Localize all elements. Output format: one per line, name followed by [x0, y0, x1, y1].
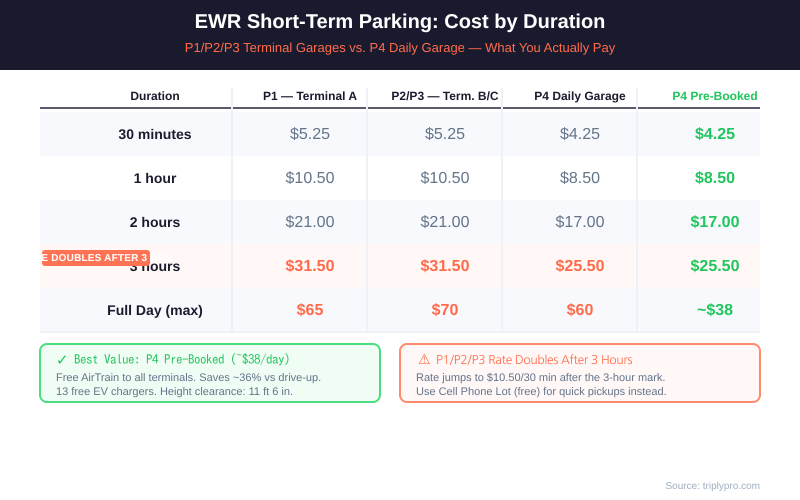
callout body: Free AirTrain to all terminals. Saves ~36% vs drive-up.	[56, 372, 321, 384]
row label: 30 minutes: 30 minutes	[118, 126, 192, 142]
price: $8.50	[695, 170, 735, 187]
price: $10.50	[421, 170, 469, 187]
callout heading: ⚠	[418, 352, 431, 368]
price: $17.00	[556, 214, 604, 231]
column heading: P1: P1 — Terminal A	[263, 89, 357, 103]
price: $21.00	[421, 214, 469, 231]
header banner	[0, 0, 800, 70]
row band: 30 minutes	[40, 112, 760, 156]
column heading: P2/P3: P2/P3 — Term. B/C	[391, 89, 499, 103]
price: $4.25	[560, 126, 600, 143]
price: ~$38	[697, 302, 733, 319]
price: $31.50	[286, 258, 334, 275]
callout heading	[56, 351, 290, 369]
row label: 3 hours: 3 hours	[130, 258, 180, 274]
column heading: P4 Pre-Booked: P4 Pre-Booked	[672, 89, 758, 103]
callout heading	[418, 352, 632, 368]
price: $21.00	[286, 214, 334, 231]
price: $17.00	[691, 214, 739, 231]
title: EWR Short-Term Parking: Cost by Duration	[195, 11, 605, 33]
price: $5.25	[425, 126, 465, 143]
callout heading: ✓	[56, 351, 69, 369]
source note: Source: triplypro.com	[666, 481, 760, 492]
subtitle: P1/P2/P3 Terminal Garages vs. P4 Daily Garage — What You Actually Pay	[185, 40, 615, 55]
callout: best value	[39, 343, 381, 403]
header rule	[40, 107, 760, 109]
callout heading: P1/P2/P3 Rate Doubles After 3 Hours	[436, 354, 632, 366]
callout body: 13 free EV chargers. Height clearance: 11 ft 6 in.	[56, 386, 293, 398]
callout body: Use Cell Phone Lot (free) for quick pickups instead.	[416, 386, 667, 398]
callout heading: Best Value: P4 Pre-Booked (~$38/day)	[74, 353, 290, 366]
price: $25.50	[691, 258, 739, 275]
row label: 2 hours: 2 hours	[130, 214, 180, 230]
price: $60	[567, 302, 593, 319]
price: $5.25	[290, 126, 330, 143]
column heading: P4 Daily: P4 Daily Garage	[534, 89, 626, 103]
price: $65	[297, 302, 323, 319]
price: $4.25	[695, 126, 735, 143]
price: $8.50	[560, 170, 600, 187]
price: $10.50	[286, 170, 334, 187]
price: $25.50	[556, 258, 604, 275]
price: $70	[432, 302, 458, 319]
pricing table	[40, 88, 760, 333]
price: $31.50	[421, 258, 469, 275]
row label: 1 hour: 1 hour	[134, 170, 176, 186]
column heading: Duration: Duration	[130, 89, 180, 103]
callout body	[416, 372, 667, 398]
callout: rate warning	[399, 343, 761, 403]
row band: full day	[40, 288, 760, 333]
callout body	[56, 372, 321, 398]
row band: 2 hours	[40, 200, 760, 244]
callout body: Rate jumps to $10.50/30 min after the 3-hour mark.	[416, 372, 665, 384]
badge: rate doubles	[42, 250, 150, 266]
row band: 3 hours highlighted	[40, 244, 760, 288]
row label: Full Day: Full Day (max)	[107, 302, 203, 318]
